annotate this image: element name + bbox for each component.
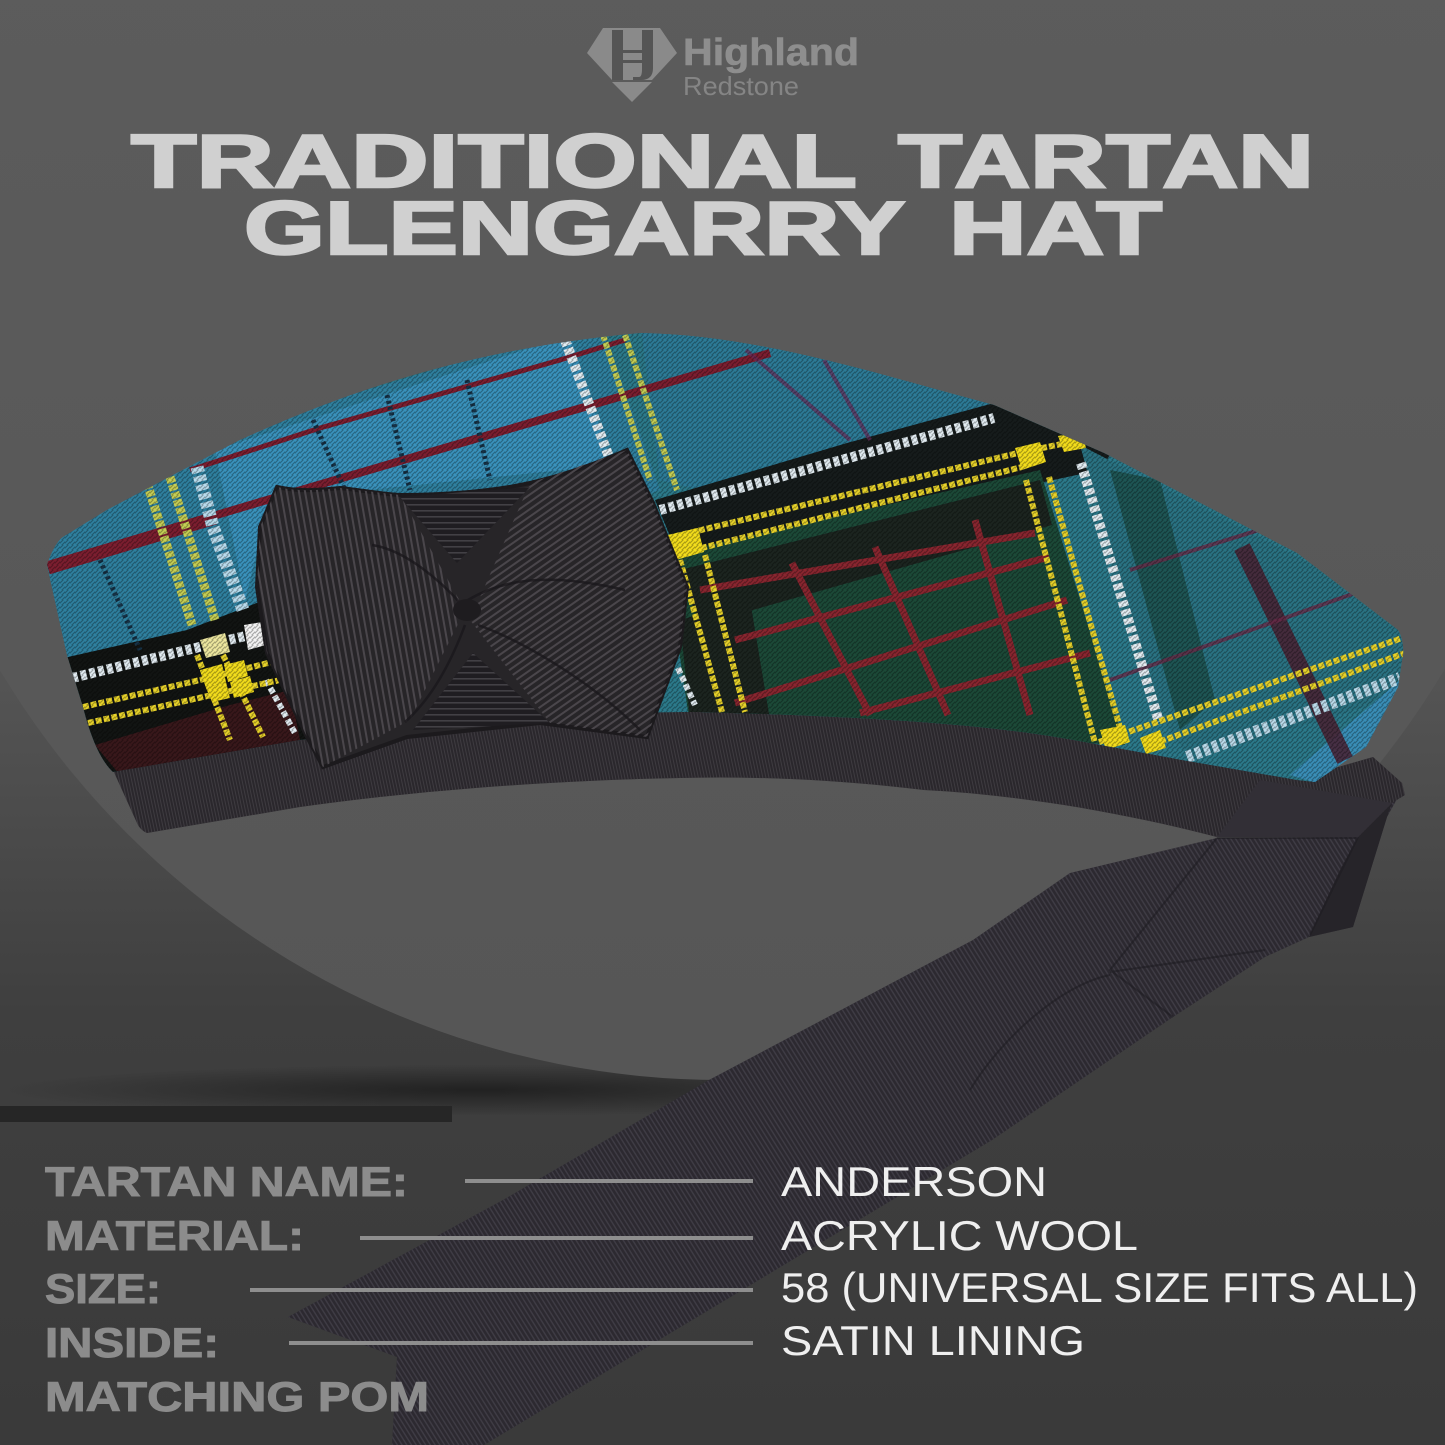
tartan: white stripes: [72, 340, 1400, 757]
tartan: teal upper section: [642, 333, 994, 488]
logo: Highland Redstone: [587, 28, 859, 102]
title: TARTAN: [898, 119, 1314, 203]
tartan: dark green square: [665, 470, 1125, 745]
title: GLENGARRY: [244, 186, 905, 270]
spec values: ACRYLIC WOOL: [781, 1212, 1138, 1259]
tartan: bottom right blue patch: [1290, 681, 1399, 782]
tartan: dark lower-left band: [68, 602, 306, 772]
spec labels: TARTAN NAME:: [45, 1158, 408, 1205]
spec values: SATIN LINING: [781, 1317, 1085, 1364]
title: TRADITIONAL: [131, 119, 857, 203]
title: HAT: [949, 186, 1162, 270]
hat bow: [257, 450, 687, 767]
spec values: ANDERSON: [781, 1158, 1047, 1205]
spec labels: INSIDE:: [45, 1319, 219, 1366]
bow left wing: [257, 487, 465, 767]
spec labels: MATCHING POM: [45, 1373, 429, 1420]
bow twist creases: [372, 545, 640, 730]
tail fold seams: [970, 837, 1358, 1090]
title: [131, 119, 1314, 270]
bow bottom pleat: [413, 653, 550, 730]
bow top pleat: [400, 487, 530, 563]
logo: Highland Redstone: Redstone: [683, 71, 799, 101]
spec values: [781, 1158, 1418, 1364]
hat crown: tartan fabric: [40, 320, 1420, 800]
tartan: maroon lines on blue: [48, 340, 1420, 760]
divider bar: [0, 1106, 452, 1122]
leader lines: [250, 1181, 753, 1343]
tartan: dark checks in square: [680, 480, 1052, 720]
logo: Highland Redstone: Highland: [683, 32, 859, 74]
twill texture overlay: [40, 320, 1420, 800]
spec values: 58 (UNIVERSAL SIZE FITS ALL): [781, 1264, 1418, 1311]
tartan: blue section: [40, 320, 660, 660]
hat band: [113, 710, 1405, 837]
tail under fold: [1309, 803, 1392, 937]
tartan: thin dark verticals: [100, 380, 490, 650]
tartan: yellow crossing patches: [200, 432, 1166, 754]
tartan: maroon in dark band: [95, 690, 300, 775]
spec labels: SIZE:: [45, 1265, 161, 1312]
tartan: white patch: [244, 622, 266, 650]
tartan: maroon grid: [700, 520, 1090, 715]
bow knot: [453, 599, 481, 621]
tartan: yellow stripes: [83, 335, 1405, 747]
spec labels: MATERIAL:: [45, 1212, 304, 1259]
shadow under circle: [0, 1064, 960, 1116]
hat tail ribbon: [288, 790, 1402, 1445]
spec labels: [45, 1158, 429, 1420]
band end block: [1217, 780, 1392, 837]
tartan: base colour: [40, 320, 1420, 800]
background circle panel: [0, 0, 1445, 1080]
tartan: teal right section: [1081, 448, 1404, 738]
tartan: dark band upper right: [655, 403, 1110, 560]
tartan: pale yellow-white patch: [200, 633, 230, 658]
bow right wing: [470, 450, 687, 737]
